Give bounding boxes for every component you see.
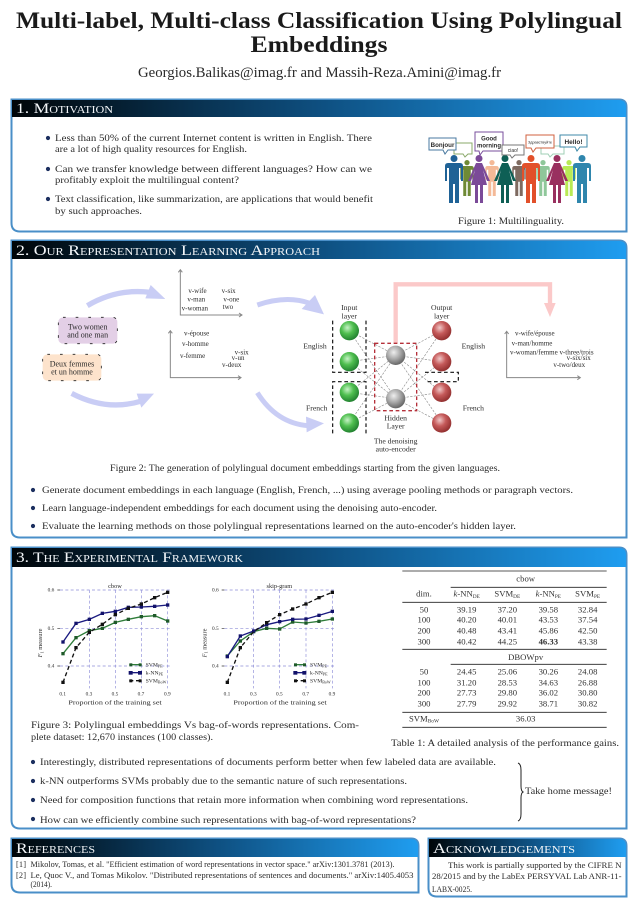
heading: motivation [12, 100, 626, 117]
heading: approach [12, 241, 626, 259]
line chart: cbow: 0.5 [48, 626, 55, 632]
results table: 24.45 [457, 666, 476, 676]
figure: multilingual people [429, 132, 591, 203]
plot: polylingual embeddings [505, 329, 594, 380]
network labels: auto-encoder [376, 445, 416, 454]
results table: SVM [409, 713, 428, 723]
takeaway bullets [31, 757, 496, 826]
results table: 26.88 [578, 677, 597, 687]
network labels: The denoising [374, 437, 418, 446]
results table: cbow [516, 574, 536, 584]
approach bullets [31, 485, 573, 532]
dashed groupings [333, 321, 458, 433]
results table: 31.20 [457, 677, 476, 687]
line chart: skip-gram: F [201, 653, 208, 658]
results table: DBOWpv [508, 652, 544, 662]
results table: 45.86 [539, 625, 559, 635]
figure 3 caption: plete dataset: 12,670 instances (100 classes). [31, 732, 213, 743]
diagram: denoising auto-encoder [303, 284, 594, 454]
panel: motivation [12, 100, 626, 232]
results table: k-NN [536, 589, 555, 599]
results table: SVM [575, 589, 594, 599]
results table: 27.73 [457, 687, 476, 697]
line chart: cbow: k-NN [146, 670, 159, 676]
motivation bullets: Text classification, like summarization, are applications that would benefit [55, 194, 373, 205]
figure 2 caption: Figure 2: The generation of polylingual document embeddings starting from the given languages. [110, 463, 500, 474]
results table: 39.19 [457, 604, 476, 614]
plot: english embeddings: v-wife [188, 287, 207, 295]
plot: polylingual embeddings: v-wife/épouse [515, 329, 555, 337]
results table: PE [555, 594, 561, 600]
plot: polylingual embeddings: v-two/deux [553, 361, 586, 369]
plot: english embeddings: v-one [223, 296, 239, 304]
box: french sentence [43, 354, 101, 381]
network labels: Input [341, 303, 358, 312]
results table: 100 [418, 677, 430, 687]
results table: 24.08 [578, 666, 597, 676]
heading: experimental framework: 3. The Experimental Framework [16, 550, 244, 566]
plot: english embeddings [178, 270, 242, 317]
projection arrow [396, 284, 556, 343]
results table: 100 [418, 615, 430, 625]
reference list: (2014). [30, 880, 52, 889]
motivation bullets: profitably exploit the multilingual content? [55, 175, 239, 186]
heading: experimental framework [12, 548, 626, 567]
line chart: cbow: 0.7 [138, 692, 145, 698]
line chart: skip-gram: measure [201, 628, 208, 651]
plot: french embeddings: v-six [235, 348, 249, 356]
panel: representation learning approach [12, 240, 626, 538]
reference list: [1] [16, 860, 26, 869]
authors: Georgios.Balikas@imag.fr and Massih-Reza.Amini@imag.fr [138, 65, 501, 81]
line chart: cbow: measure [37, 628, 44, 651]
line chart: skip-gram: BoW [322, 679, 331, 684]
figure: multilingual people: Hello! [564, 139, 583, 146]
title: Embeddings [250, 32, 388, 57]
plot: french embeddings: v-femme [180, 352, 205, 360]
figure: multilingual people: ciao! [508, 148, 518, 154]
acknowledgement text: This work is partially supported by the CIFRE N [448, 860, 622, 870]
line chart: skip-gram: 0.6 [212, 588, 219, 594]
line chart: skip-gram [201, 583, 336, 707]
network labels: French [306, 403, 327, 412]
arrows: languages to embeddings [72, 285, 324, 432]
results table: 38.71 [539, 699, 558, 709]
line chart: cbow: SVM [146, 678, 158, 684]
box: english sentence: Two women [68, 323, 107, 332]
network labels: English [303, 341, 327, 350]
reference list: Le, Quoc V., and Tomas Mikolov. "Distributed representations of sentences and documents." arXiv:1405.4053 [30, 871, 414, 880]
heading: acknowledgements [429, 839, 626, 857]
results table: 29.92 [498, 699, 517, 709]
takeaway bullets: Interestingly, distributed representations of documents perform better when few labeled data are available. [40, 757, 496, 768]
plot: french embeddings: v-épouse [184, 329, 209, 337]
line chart: skip-gram: PE [322, 664, 327, 669]
figure 3 caption: Figure 3: Polylingual embeddings Vs bag-of-words representations. Com- [31, 720, 359, 731]
network labels: Hidden [384, 413, 407, 422]
box: french sentence: Deux femmes [50, 360, 94, 369]
results table: dim. [416, 589, 432, 599]
results table: PE [594, 594, 600, 600]
line chart: cbow: 0.5 [112, 692, 119, 698]
panel: references [12, 838, 418, 892]
figure 1 caption: Figure 1: Multilinguality. [458, 216, 564, 227]
output layer nodes [432, 321, 451, 433]
results table: 28.53 [498, 677, 517, 687]
takeaway bullets: Need for composition functions that retain more information when combining word representations. [40, 795, 468, 806]
line chart: skip-gram: 0.9 [329, 692, 336, 698]
network labels: layer [342, 311, 357, 320]
line chart: cbow: 1 [39, 651, 44, 653]
results table: 200 [418, 625, 430, 635]
acknowledgement text [432, 860, 622, 894]
line chart: skip-gram: 0.1 [224, 692, 231, 698]
results table: 34.63 [539, 677, 558, 687]
results table: 44.25 [498, 636, 517, 646]
approach bullets: Generate document embeddings in each language (English, French, ...) using average pooling methods or paragraph vectors. [42, 485, 573, 496]
reference list: [2] [16, 871, 26, 880]
approach bullets: Evaluate the learning methods on those polylingual representations learned on the auto-encoder's hidden layer. [42, 521, 516, 532]
heading: acknowledgements: Acknowledgements [433, 841, 575, 857]
figure: multilingual people: Good [481, 136, 497, 142]
reference list: Mikolov, Tomas, et al. "Efficient estimation of word representations in vector space." arXiv:1301.3781 (2013). [30, 860, 394, 869]
results table: 39.58 [539, 604, 558, 614]
results table: 37.20 [498, 604, 517, 614]
takeaway bullets: k-NN outperforms SVMs probably due to the semantic nature of such representations. [40, 776, 407, 787]
take home message: Take home message! [525, 786, 612, 797]
line chart: cbow: cbow [108, 583, 122, 590]
hidden layer nodes [386, 346, 405, 408]
results table: 46.33 [539, 636, 559, 646]
line chart: skip-gram: 0.5 [276, 692, 283, 698]
results table: SVM [494, 589, 513, 599]
motivation bullets [46, 133, 373, 217]
figure: multilingual people: morning [477, 144, 501, 150]
plot: french embeddings [168, 329, 249, 380]
takeaway bullets: How can we efficiently combine such representations with bag-of-word representations? [40, 815, 416, 826]
line chart: skip-gram: SVM [310, 663, 322, 669]
motivation bullets: are a lot of high quality resources for English. [55, 144, 247, 155]
network labels: Output [431, 303, 453, 312]
line chart: cbow: 0.3 [86, 692, 93, 698]
results table: 32.84 [578, 604, 598, 614]
results table: 40.42 [457, 636, 476, 646]
results table: 30.80 [578, 687, 597, 697]
plot: english embeddings: two [223, 303, 234, 311]
results table: 25.06 [498, 666, 518, 676]
panel: acknowledgements [428, 838, 626, 896]
plot: english embeddings: v-six [222, 287, 236, 295]
results table: 37.54 [578, 615, 598, 625]
line chart: cbow [37, 583, 172, 707]
line chart: skip-gram: SVM [310, 678, 322, 684]
results table: 27.79 [457, 699, 476, 709]
results table: DE [473, 594, 480, 600]
diagram: sentences and embedding spaces [43, 270, 324, 432]
panel: experimental framework [12, 548, 626, 828]
results table: k-NN [453, 589, 473, 599]
network labels: French [463, 403, 484, 412]
line chart: cbow: F [37, 653, 44, 658]
heading: approach: 2. Our Representation Learning Approach [16, 243, 320, 259]
plot: english embeddings: v-woman [182, 304, 209, 312]
line chart: cbow: Proportion of the training set [68, 700, 162, 707]
line chart: cbow: PE [159, 671, 164, 676]
figure: multilingual people: Bonjour [431, 142, 455, 149]
line chart: cbow: BoW [158, 679, 167, 684]
input layer nodes [340, 321, 359, 433]
results table: 300 [418, 636, 430, 646]
line chart: skip-gram: k-NN [310, 670, 323, 676]
motivation bullets: Less than 50% of the current Internet content is written in English. There [55, 133, 372, 144]
title [16, 8, 622, 57]
line chart: cbow: 0.4 [48, 664, 55, 670]
table 1 caption: Table 1: A detailed analysis of the performance gains. [391, 738, 619, 749]
network edges [349, 331, 442, 423]
motivation bullets: Can we transfer knowledge between different languages? How can we [55, 164, 372, 175]
results table: 36.03 [516, 713, 535, 723]
plot: polylingual embeddings: v-man/homme [512, 339, 552, 347]
line chart: skip-gram: PE [323, 671, 328, 676]
heading: references [12, 839, 418, 857]
figure: multilingual people: Здравствуйте [528, 140, 552, 144]
line chart: skip-gram: 0.5 [212, 626, 219, 632]
approach bullets: Learn language-independent embeddings for each document using the denoising auto-encoder. [42, 503, 437, 514]
plot: polylingual embeddings: v-six/six [567, 354, 591, 362]
results table [402, 571, 607, 727]
line chart: skip-gram: 0.4 [212, 664, 219, 670]
line chart: cbow: 0.9 [164, 692, 171, 698]
line chart: cbow: PE [158, 664, 163, 669]
figure 3 caption [31, 720, 359, 743]
results table: 43.41 [498, 625, 517, 635]
heading: motivation: 1. Motivation [16, 101, 113, 117]
results table: 42.50 [578, 625, 597, 635]
box: english sentence: and one man [67, 331, 108, 340]
line chart: skip-gram: 0.3 [250, 692, 257, 698]
results table: 30.26 [539, 666, 559, 676]
plot: french embeddings: v-un [232, 354, 245, 362]
line chart: cbow: 0.6 [48, 588, 55, 594]
line chart: cbow: SVM [146, 663, 158, 669]
network labels: English [462, 341, 485, 350]
heading: references: References [16, 841, 95, 857]
results table: 50 [420, 604, 428, 614]
line chart: skip-gram: Proportion of the training set [233, 700, 327, 707]
motivation bullets: by such approaches. [55, 206, 142, 217]
results table: 50 [420, 666, 428, 676]
line chart: skip-gram: skip-gram [266, 583, 292, 590]
title: Multi-label, Multi-class Classification Using Polylingual [16, 8, 622, 33]
reference list [16, 860, 414, 889]
network labels: layer [434, 311, 450, 320]
box: french sentence: et un homme [51, 368, 93, 377]
results table: DE [513, 594, 520, 600]
plot: english embeddings: v-man [187, 296, 206, 304]
results table: 29.80 [498, 687, 517, 697]
results table: 200 [418, 687, 430, 697]
box: english sentence [58, 317, 117, 344]
plot: french embeddings: v-homme [182, 340, 209, 348]
results table: 30.82 [578, 699, 597, 709]
results table: 300 [418, 699, 430, 709]
acknowledgement text: LABX-0025. [432, 884, 472, 894]
results table: 40.01 [498, 615, 517, 625]
results table: 40.20 [457, 615, 476, 625]
line chart: skip-gram: 1 [204, 651, 209, 653]
network labels [303, 303, 485, 454]
line chart: skip-gram: 0.7 [302, 692, 309, 698]
network labels: Layer [387, 422, 405, 431]
results table: 43.38 [578, 636, 597, 646]
results table: 36.02 [539, 687, 558, 697]
results table: BoW [428, 719, 440, 725]
brace [518, 763, 523, 821]
acknowledgement text: 28/2015 and by the LabEx PERSYVAL Lab ANR-11- [432, 871, 622, 881]
results table: 40.48 [457, 625, 476, 635]
results table: 43.53 [539, 615, 558, 625]
line chart: cbow: 0.1 [59, 692, 66, 698]
plot: polylingual embeddings: v-woman/femme v-three/trois [510, 348, 594, 356]
plot: french embeddings: v-deux [222, 361, 242, 369]
